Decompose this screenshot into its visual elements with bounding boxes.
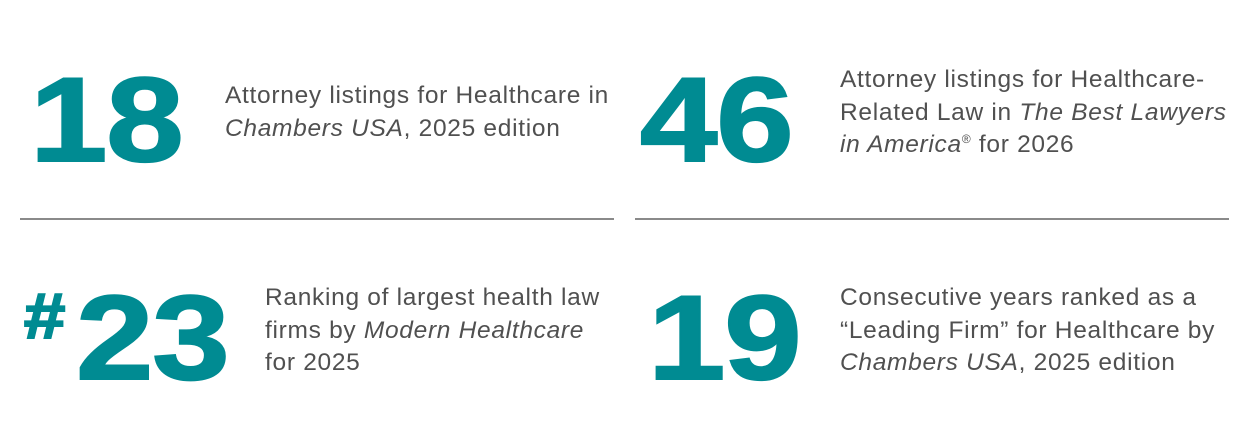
text: 46 description: in America® for 2026 — [840, 131, 1074, 158]
text: 23 description: for 2025 — [265, 349, 361, 376]
stat: #23 — [24, 271, 229, 405]
stat: 19: 19 — [648, 271, 801, 405]
stat: 18: 18 — [30, 53, 183, 187]
text: 19 description: “Leading Firm” for Healthcare by — [840, 316, 1215, 344]
text: 19 description — [840, 284, 1215, 376]
stat: 46: 46 — [640, 53, 793, 187]
text: 23 description — [265, 284, 600, 376]
text: 46 description — [840, 66, 1227, 158]
text: 46 description: Attorney listings for Healthcare- — [840, 66, 1205, 93]
text: 19 description: Consecutive years ranked as a — [840, 284, 1197, 311]
number 23: 23 — [76, 271, 229, 405]
text: 18 description: Chambers USA, 2025 edition — [225, 114, 561, 142]
text: 46 description: Related Law in The Best Lawyers — [840, 98, 1227, 126]
hash sign: # — [24, 280, 64, 352]
text: 18 description — [225, 82, 609, 142]
text: 18 description: Attorney listings for Healthcare in — [225, 82, 609, 109]
text: 19 description: Chambers USA, 2025 edition — [840, 349, 1176, 376]
text: 23 description: Ranking of largest health law — [265, 284, 600, 311]
text: 23 description: firms by Modern Healthcare — [265, 316, 584, 344]
